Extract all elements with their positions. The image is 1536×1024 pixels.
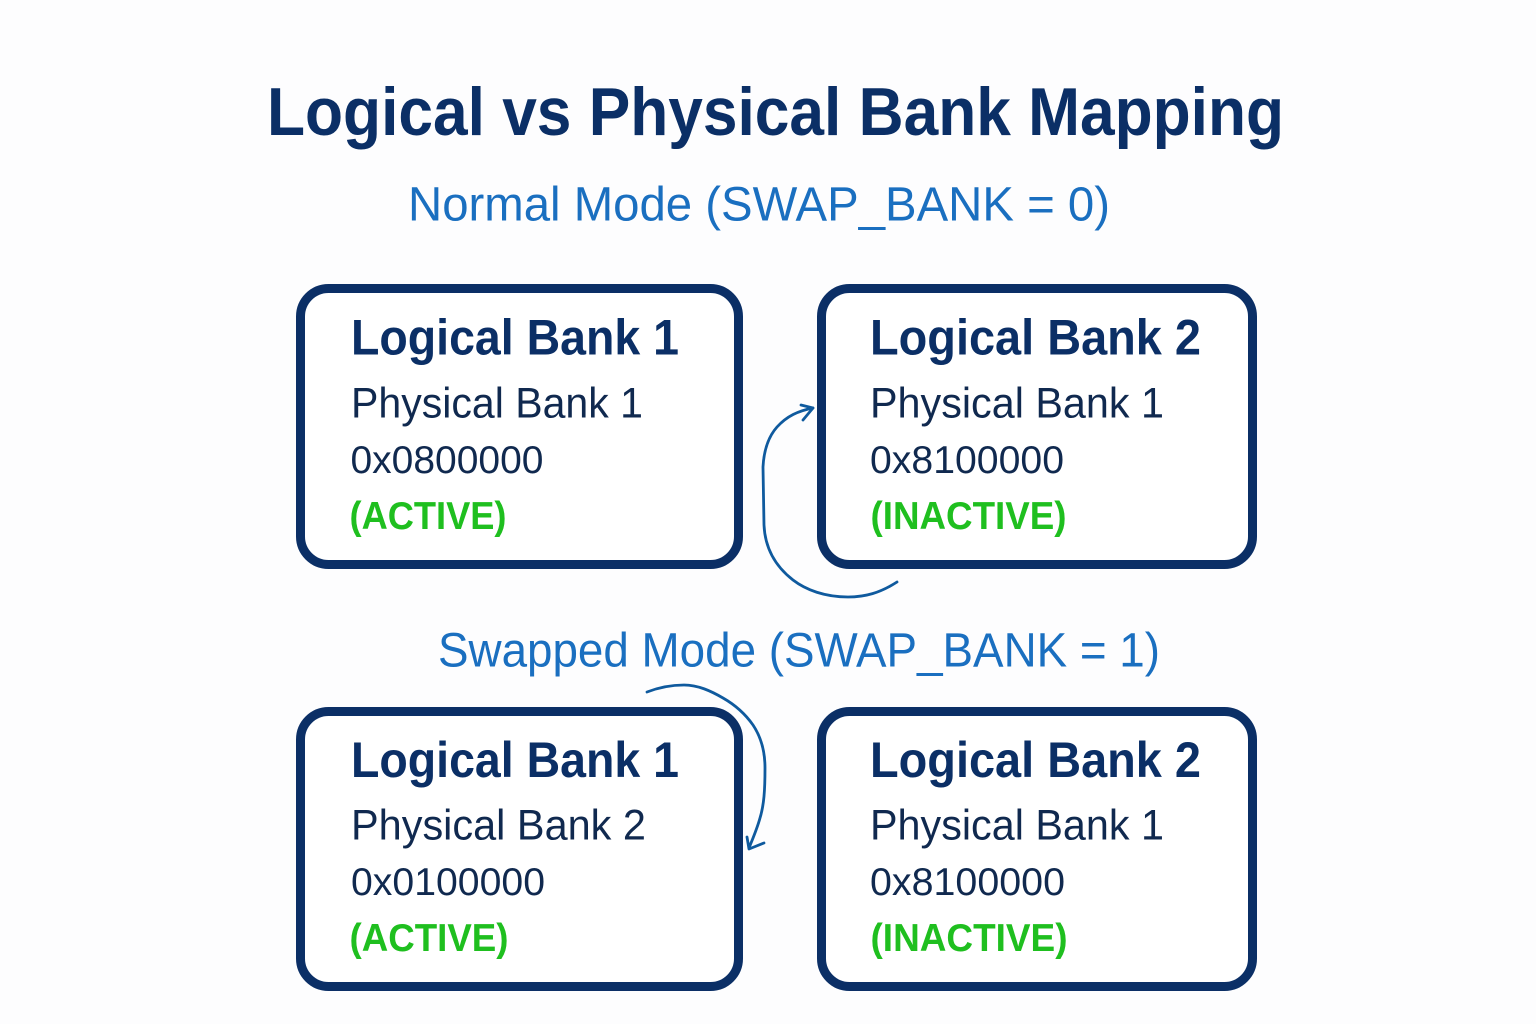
heading: swapped mode: Swapped Mode (SWAP_BANK = 1): [438, 624, 1160, 678]
title: Logical vs Physical Bank Mapping: [267, 74, 1284, 150]
panel: swapped logical bank 1: Physical Bank 2: [351, 802, 646, 850]
panel: normal logical bank 1: Logical Bank 1: [351, 310, 679, 366]
panel: swapped logical bank 2: [822, 712, 1252, 986]
panel: normal logical bank 1: 0x0800000: [350, 439, 544, 482]
panel: normal logical bank 2: [822, 288, 1252, 564]
panel: swapped logical bank 2: (INACTIVE): [870, 917, 1068, 960]
panel: normal logical bank 1: (ACTIVE): [350, 495, 506, 538]
panel: swapped logical bank 1: Logical Bank 1: [351, 732, 679, 788]
heading: normal mode: Normal Mode (SWAP_BANK = 0): [408, 178, 1110, 232]
panel: normal logical bank 2: (INACTIVE): [870, 495, 1066, 538]
panel: normal logical bank 2: Logical Bank 2: [870, 310, 1201, 366]
panel: swapped logical bank 2: Physical Bank 1: [870, 802, 1164, 850]
panel: swapped logical bank 2: 0x8100000: [870, 861, 1065, 904]
panel: normal logical bank 1: [300, 288, 738, 564]
arrow: swapped mode bank link: [647, 685, 765, 849]
arrow: normal mode bank link: [763, 405, 897, 597]
panel: swapped logical bank 1: [300, 712, 738, 986]
panel: normal logical bank 2: Physical Bank 1: [870, 380, 1164, 428]
panel: normal logical bank 2: 0x8100000: [870, 439, 1064, 482]
panel: swapped logical bank 1: (ACTIVE): [350, 917, 508, 960]
panel: normal logical bank 1: Physical Bank 1: [351, 380, 643, 428]
panel: swapped logical bank 2: Logical Bank 2: [870, 732, 1201, 788]
panel: swapped logical bank 1: 0x0100000: [351, 861, 545, 904]
